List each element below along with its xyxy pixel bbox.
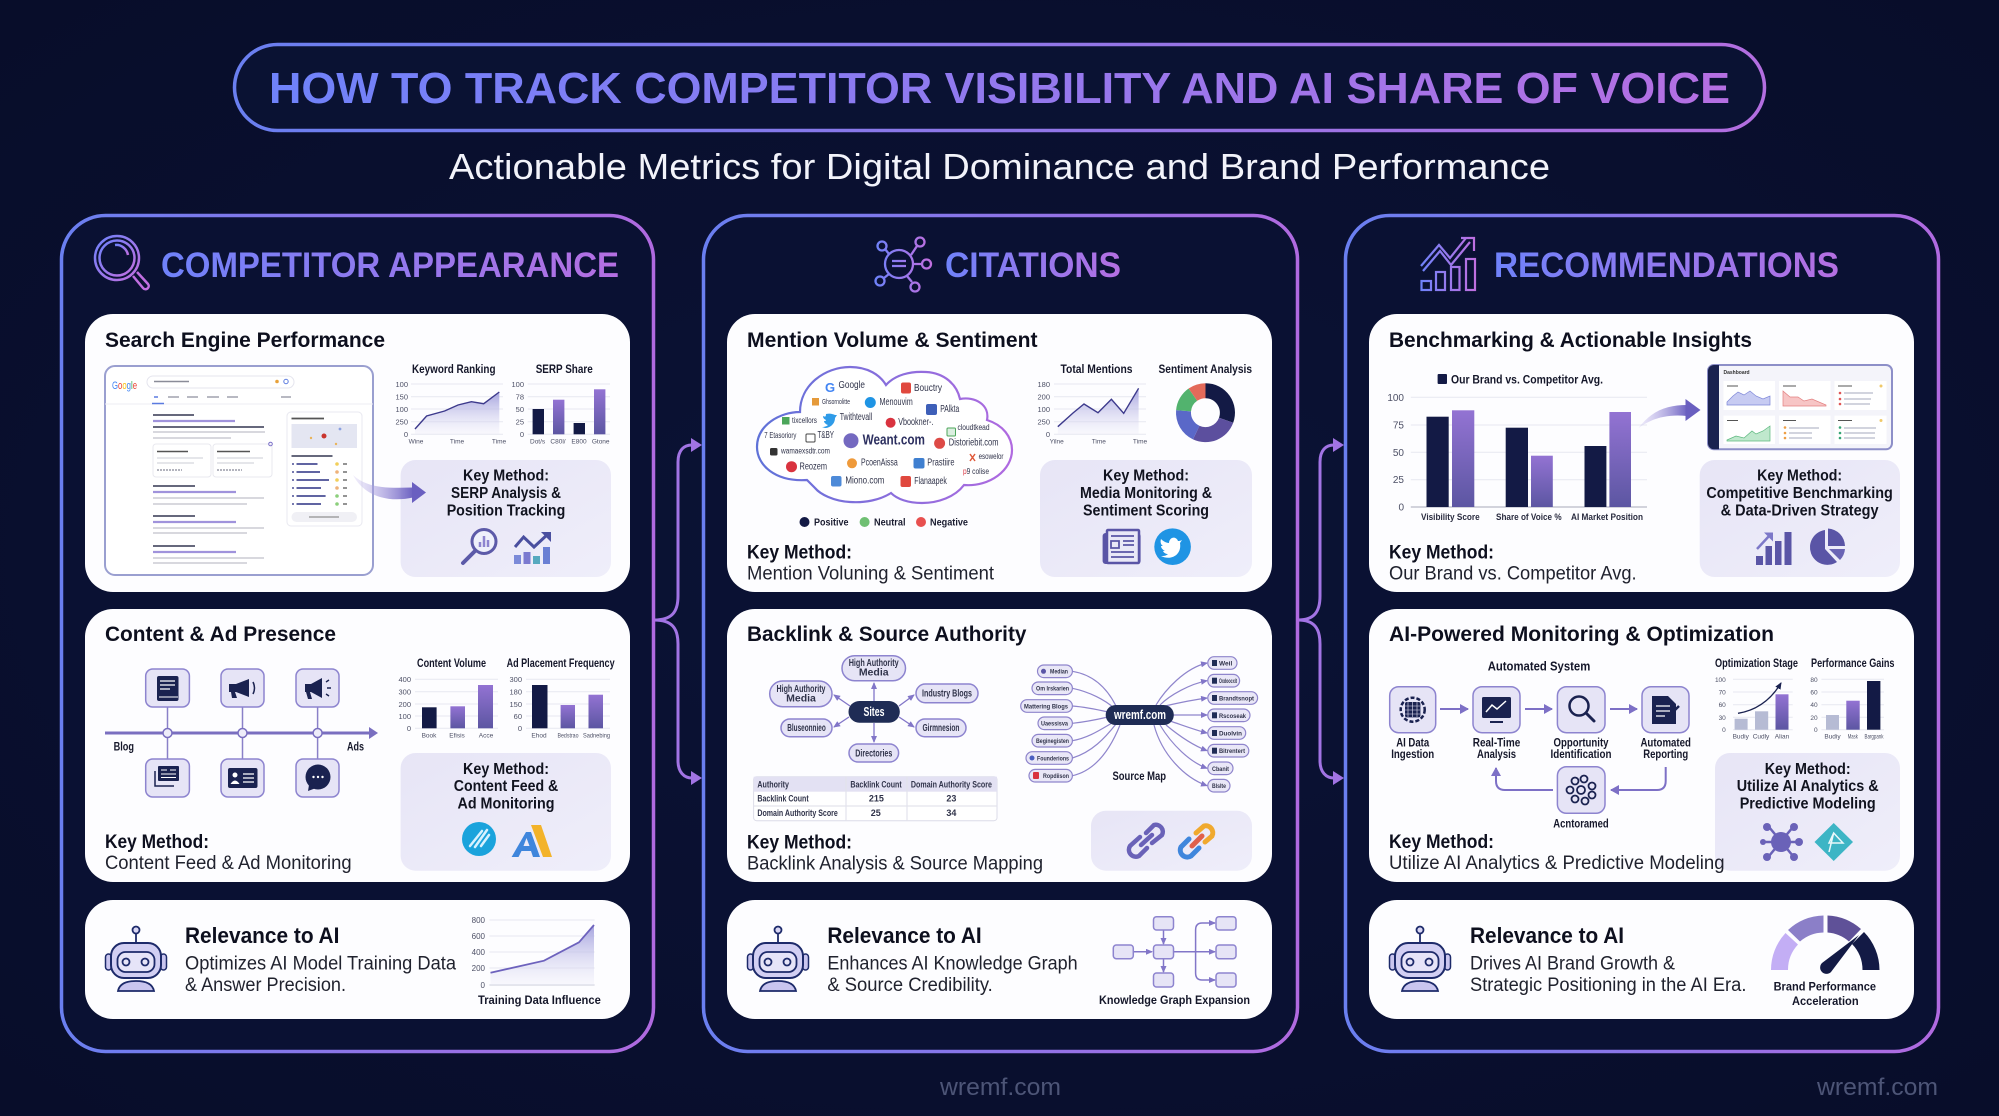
title banner: HOW TO TRACK COMPETITOR VISIBILITY AND AI SHARE OF VOICE (269, 64, 1730, 113)
key method box: SERP: SERP Analysis & (451, 485, 561, 502)
grouped bar chart: our brand vs competitor: 50 (1393, 448, 1404, 459)
icon: pie chart (1810, 528, 1845, 565)
gauge: brand performance acceleration (1771, 916, 1880, 1008)
icon: growth bars and arrow (1421, 238, 1475, 290)
brand mention cloud: T&BY (818, 430, 834, 441)
brand mention cloud: p9 colise (963, 467, 989, 476)
text: relevance to AI (827, 923, 1078, 996)
hub diagram: sites: Girmnesion (922, 722, 960, 734)
icon: robot (106, 926, 166, 991)
key method text: backlink: Key Method: (747, 832, 852, 853)
line chart: total mentions: Yilne (1050, 438, 1064, 446)
flow diagram: automated system: Ingestion (1391, 749, 1434, 761)
text: relevance to AI: Strategic Positioning in the AI Era. (1470, 975, 1746, 996)
icon: bars with arrow (1756, 532, 1792, 565)
gauge: brand performance acceleration: Acceleration (1792, 996, 1859, 1008)
key method box: content feed: Key Method: (463, 761, 549, 778)
brand mention cloud: Flanaapek (914, 476, 947, 487)
bar chart: optimization stage: Alian (1775, 734, 1790, 740)
brand mention cloud: wamaexsdtr.com (780, 447, 830, 456)
icon: magnifier with bars (463, 530, 496, 563)
hub diagram: sites (770, 656, 978, 762)
donut chart: sentiment analysis (1158, 364, 1252, 442)
bar chart: content volume: Acce (479, 732, 494, 740)
line chart: keyword ranking: Wine (409, 438, 424, 446)
hub diagram: sites: High Authority (776, 683, 826, 695)
area chart: training data influence (472, 916, 601, 1007)
legend: sentiment: Positive (814, 517, 849, 529)
bar chart: SERP share: 100 (511, 380, 524, 389)
heading: AI-powered monitoring: AI-Powered Monitoring & Optimization (1389, 622, 1774, 646)
key method box: content feed (401, 753, 611, 871)
diagram: knowledge graph expansion: Knowledge Graph Expansion (1099, 993, 1250, 1007)
bar chart: optimization stage: 100 (1715, 677, 1726, 684)
key method text: content feed: Content Feed & Ad Monitoring (105, 853, 352, 874)
bar chart: optimization stage: Cudly (1753, 734, 1770, 740)
gauge: brand performance acceleration: Brand Performance (1774, 982, 1876, 994)
grouped bar chart: our brand vs competitor: 75 (1393, 420, 1404, 432)
bar chart: SERP share: SERP Share (536, 364, 593, 376)
search results mockup (105, 366, 373, 575)
brand mention cloud: esowelor (979, 452, 1004, 461)
icon: report document (1642, 687, 1689, 733)
key method box: competitive benchmarking: Key Method: (1757, 468, 1842, 485)
legend: sentiment: Negative (930, 517, 968, 529)
text: relevance to AI: Relevance to AI (827, 923, 982, 948)
table: authority (754, 777, 997, 821)
key method text: benchmarking: Our Brand vs. Competitor Avg. (1389, 563, 1637, 584)
text: relevance to AI: & Source Credibility. (827, 975, 993, 996)
icon: magnifying glass (95, 236, 149, 289)
brand mention cloud: PAlkta (940, 404, 960, 415)
flow diagram: automated system: AI Data (1396, 738, 1430, 750)
card: search engine performance (85, 314, 630, 592)
line chart: keyword ranking: 100 (395, 380, 408, 389)
bar chart: content volume: Book (422, 732, 437, 740)
source map diagram: Uaessisva (1041, 721, 1068, 728)
brand mention cloud: Weant.com (863, 431, 925, 448)
bar chart: content volume: 100 (398, 712, 411, 721)
bar chart: ad placement frequency: Ad Placement Frequency (507, 658, 615, 670)
icon: growth chart (514, 532, 551, 564)
icon: loud speaker (296, 669, 339, 707)
heading: recommendations: RECOMMENDATIONS (1494, 246, 1839, 285)
key method text: mention (747, 542, 995, 584)
key method text: benchmarking (1389, 542, 1637, 584)
table: authority: 25 (871, 808, 881, 818)
key method box: competitive benchmarking: & Data-Driven Strategy (1721, 503, 1879, 520)
text: relevance to AI: Relevance to AI (185, 923, 339, 948)
key method box: competitive benchmarking (1700, 460, 1900, 577)
key method box: AI analytics (1715, 753, 1900, 871)
hub diagram: sites: High Authority (849, 657, 899, 669)
flow diagram: automated system (1390, 659, 1691, 831)
flow diagram: automated system: Acntoramed (1553, 819, 1609, 831)
brand mention cloud (757, 367, 1012, 503)
panel: citations (704, 216, 1298, 1052)
icon: blue feed logo (462, 822, 496, 856)
grouped bar chart: our brand vs competitor (1387, 372, 1647, 523)
brand mention cloud: Distoriebit.com (949, 438, 998, 449)
line chart: keyword ranking: Time (492, 438, 506, 446)
flow diagram: automated system: Identification (1550, 749, 1612, 761)
card: relevance to AI, knowledge graph (727, 900, 1272, 1019)
table: authority: Backlink Count (757, 794, 809, 804)
key method box: media monitoring (1040, 460, 1252, 577)
card: content and ad presence (85, 609, 630, 882)
bar chart: ad placement frequency: 0 (518, 724, 522, 733)
bar chart: optimization stage (1715, 658, 1798, 740)
line chart: keyword ranking: Keyword Ranking (412, 364, 496, 376)
line chart: total mentions: 200 (1037, 392, 1050, 402)
bar chart: performance gains: Budiy (1824, 734, 1841, 740)
key method box: competitive benchmarking: Competitive Benchmarking (1706, 485, 1893, 502)
source map diagram: Source Map (1112, 771, 1166, 783)
bar chart: ad placement frequency: 150 (509, 700, 522, 709)
brand mention cloud: cloudtkead (958, 423, 990, 432)
bar chart: SERP share: 0 (520, 430, 524, 439)
icon: monitor (1473, 687, 1520, 733)
heading: citations: CITATIONS (945, 246, 1121, 285)
heading: mention volume and sentiment: Mention Volume & Sentiment (747, 328, 1038, 352)
source map diagram: Weil (1219, 660, 1232, 668)
text: relevance to AI: Relevance to AI (1470, 923, 1624, 948)
brand mention cloud: tixcellors (792, 416, 817, 425)
bar chart: SERP share: 25 (516, 418, 524, 426)
brand mention cloud: Twithtevall (840, 412, 872, 423)
arrow: citations to recommendations (1298, 438, 1344, 785)
brand mention cloud: Prastiire (927, 458, 955, 469)
icon: citation network (876, 238, 931, 292)
bar chart: performance gains: Performance Gains (1811, 658, 1894, 670)
timeline diagram: Blog (114, 740, 134, 754)
source map diagram: Bitrentert (1219, 748, 1246, 755)
bar chart: SERP share: 78 (516, 392, 524, 402)
line chart: total mentions (1037, 364, 1147, 446)
key method box: content feed: Content Feed & (454, 778, 558, 795)
bar chart: SERP share: E800 (571, 438, 587, 446)
card: mention volume and sentiment (727, 314, 1272, 592)
card: relevance to AI, training data (85, 900, 630, 1019)
table: authority: Domain Authority Score (757, 808, 838, 818)
key method text: content feed (105, 832, 352, 874)
source map diagram: Beginegisten (1036, 738, 1069, 745)
source map diagram: Blslte (1212, 783, 1226, 790)
text: relevance to AI: Optimizes AI Model Training Data (185, 953, 456, 974)
bar chart: performance gains: 40 (1810, 702, 1818, 709)
table: authority: Domain Authority Score (911, 779, 992, 789)
arrow: chart to dashboard (1638, 399, 1700, 428)
area chart: training data influence: 600 (472, 932, 486, 941)
bar chart: optimization stage: 30 (1719, 715, 1726, 722)
panel: competitor appearance (62, 216, 654, 1052)
line chart: keyword ranking: Time (450, 438, 464, 446)
bar chart: optimization stage: 70 (1719, 690, 1726, 696)
icon: robot (1390, 926, 1450, 991)
icon: chat bubble (296, 759, 339, 797)
key method text: mention: Key Method: (747, 542, 852, 563)
icon: book (146, 669, 189, 707)
key method box: links (1091, 811, 1252, 871)
source map diagram (1021, 657, 1258, 792)
key method text: content feed: Key Method: (105, 832, 209, 853)
hub diagram: sites: Bluseonnieo (787, 722, 826, 734)
icon: chain link (1129, 825, 1163, 857)
dashboard mockup (1708, 365, 1892, 449)
icon: teal diamond (1814, 823, 1853, 861)
card: backlink and source authority (727, 609, 1272, 882)
flow diagram: automated system: Reporting (1643, 749, 1688, 761)
bar chart: performance gains (1810, 658, 1894, 740)
bar chart: content volume: Content Volume (417, 658, 486, 670)
bar chart: ad placement frequency: 60 (514, 712, 522, 721)
bar chart: ad placement frequency: 300 (509, 675, 522, 684)
flow diagram: automated system: Analysis (1477, 749, 1516, 761)
bar chart: optimization stage: Budiy (1733, 734, 1750, 740)
bar chart: ad placement frequency: Bedstrao (558, 732, 579, 740)
key method text: AI analytics: Utilize AI Analytics & Predictive Modeling (1389, 853, 1725, 874)
source map diagram: wremf.com (1113, 707, 1166, 722)
line chart: total mentions: 250 (1037, 418, 1050, 426)
hub diagram: sites: Media (859, 666, 889, 678)
grouped bar chart: our brand vs competitor: 25 (1393, 475, 1404, 486)
title banner (234, 44, 1764, 130)
area chart: training data influence: 800 (472, 916, 486, 925)
brand mention cloud: Ghsornolitte (822, 397, 850, 406)
icon: newspaper (1103, 530, 1141, 564)
key method text: backlink (747, 832, 1043, 874)
key method box: AI analytics: Predictive Modeling (1740, 796, 1876, 813)
icon: robot (748, 926, 808, 991)
bar chart: performance gains: Mask (1848, 734, 1858, 740)
heading: benchmarking: Benchmarking & Actionable Insights (1389, 328, 1752, 352)
key method text: AI analytics (1389, 832, 1725, 874)
search results mockup: Google (112, 380, 137, 392)
subtitle: Actionable Metrics for Digital Dominance and Brand Performance (449, 146, 1550, 187)
line chart: total mentions: Total Mentions (1060, 364, 1132, 376)
line chart: total mentions: Time (1133, 438, 1147, 446)
heading: search engine performance: Search Engine Performance (105, 328, 385, 352)
line chart: total mentions: 100 (1037, 405, 1050, 414)
bar chart: ad placement frequency: Ehod (531, 732, 547, 740)
grouped bar chart: our brand vs competitor: AI Market Position (1571, 512, 1643, 523)
bar chart: performance gains: 20 (1810, 715, 1818, 722)
arrow: competitor appearance to citations (654, 438, 702, 785)
line chart: keyword ranking: 150 (395, 392, 408, 402)
brand mention cloud: Bouctry (914, 383, 942, 394)
bar chart: SERP share (511, 364, 610, 446)
source map diagram: Om lrskarien (1036, 686, 1069, 693)
bar chart: optimization stage: 60 (1719, 702, 1726, 709)
key method text: backlink: Backlink Analysis & Source Mapping (747, 853, 1043, 874)
bar chart: content volume: 0 (407, 724, 411, 733)
grouped bar chart: our brand vs competitor: Our Brand vs. Competitor Avg. (1451, 372, 1603, 386)
card: benchmarking and actionable insights (1369, 314, 1914, 592)
key method box: content feed: Ad Monitoring (458, 796, 554, 813)
arrow: results to key method (353, 475, 426, 503)
legend: sentiment: Neutral (874, 517, 906, 529)
source map diagram: Brandtsnopt (1219, 696, 1255, 702)
brand mention cloud: Menouvim (880, 397, 913, 408)
bar chart: performance gains: Bargpank (1864, 734, 1884, 740)
icon: twitter bird (1154, 528, 1191, 565)
source map diagram: Rscoseak (1219, 713, 1246, 720)
bar chart: SERP share: Dot/s (530, 438, 546, 446)
bar chart: ad placement frequency: Sadnebing (583, 732, 610, 740)
area chart: training data influence: 200 (472, 964, 486, 973)
text: relevance to AI: Enhances AI Knowledge Graph (827, 953, 1078, 974)
bar chart: content volume (398, 658, 498, 740)
card: AI-powered monitoring and optimization (1369, 609, 1914, 882)
key method box: media monitoring: Key Method: (1103, 468, 1189, 485)
flow diagram: automated system: Automated System (1488, 659, 1590, 674)
line chart: total mentions: 180 (1037, 380, 1050, 389)
key method box: SERP: Key Method: (463, 468, 549, 485)
bar chart: optimization stage: Optimization Stage (1715, 658, 1798, 670)
grouped bar chart: our brand vs competitor: Share of Voice % (1496, 512, 1562, 523)
bar chart: ad placement frequency: 180 (509, 688, 522, 696)
table: authority: Backlink Count (850, 779, 902, 789)
diagram: knowledge graph expansion (1099, 917, 1250, 1007)
hub diagram: sites: Directories (855, 748, 892, 760)
panel: recommendations (1346, 216, 1938, 1052)
icon: AI network hub (1760, 823, 1803, 861)
text: relevance to AI: Drives AI Brand Growth & (1470, 953, 1675, 974)
bar chart: content volume: 300 (398, 688, 411, 696)
brand mention cloud: 7 Etasoriory (764, 431, 796, 440)
brand mention cloud: Google (838, 380, 865, 391)
text: relevance to AI (185, 923, 456, 996)
bar chart: SERP share: 50 (516, 405, 524, 414)
icon: AI chip (1390, 687, 1436, 733)
text: relevance to AI: & Answer Precision. (185, 975, 346, 996)
flow diagram: automated system: Opportunity (1554, 738, 1609, 750)
source map diagram: Duolvin (1219, 730, 1242, 738)
key method text: AI analytics: Key Method: (1389, 832, 1494, 853)
source map diagram: Mattering Blogs (1024, 703, 1068, 710)
footer watermark: right: wremf.com (1816, 1074, 1938, 1101)
source map diagram: Ropdiison (1043, 773, 1069, 780)
brand mention cloud: Vbookner-. (898, 417, 933, 428)
grouped bar chart: our brand vs competitor: 0 (1398, 502, 1404, 514)
key method box: AI analytics: Key Method: (1765, 761, 1851, 778)
flow diagram: automated system: Real-Time (1473, 738, 1520, 750)
source map diagram: Median (1050, 669, 1068, 676)
line chart: keyword ranking: 250 (395, 418, 408, 426)
line chart: keyword ranking (395, 364, 506, 446)
key method box: media monitoring: Sentiment Scoring (1083, 503, 1209, 520)
key method box: SERP: Position Tracking (447, 503, 565, 520)
source map diagram: Founderions (1037, 755, 1069, 762)
timeline diagram (105, 669, 378, 797)
heading: content and ad presence: Content & Ad Presence (105, 622, 336, 646)
dashboard mockup: Dashboard (1724, 370, 1750, 376)
key method box: media monitoring: Media Monitoring & (1080, 485, 1212, 502)
key method text: mention: Mention Voluning & Sentiment (747, 563, 995, 584)
bar chart: performance gains: 60 (1810, 690, 1818, 696)
line chart: total mentions: Time (1092, 438, 1106, 446)
table: authority: 23 (946, 794, 956, 804)
key method box: AI analytics: Utilize AI Analytics & (1737, 778, 1879, 795)
bar chart: optimization stage: 0 (1722, 727, 1726, 734)
icon: ads logo (512, 825, 552, 857)
icon: colored chain link (1180, 826, 1213, 857)
brand mention cloud: Reozem (800, 461, 827, 472)
timeline diagram: Ads (347, 740, 364, 754)
hub diagram: sites: Media (786, 692, 816, 704)
heading: backlink and source authority: Backlink & Source Authority (747, 622, 1026, 646)
donut chart: sentiment analysis: Sentiment Analysis (1158, 364, 1252, 376)
brand mention cloud: G (825, 380, 835, 395)
bar chart: SERP share: Gtone (592, 438, 610, 446)
grouped bar chart: our brand vs competitor: 100 (1387, 393, 1404, 404)
line chart: keyword ranking: 0 (404, 430, 408, 439)
icon: megaphone (221, 669, 264, 707)
bar chart: performance gains: 0 (1814, 727, 1818, 734)
card: relevance to AI, brand growth (1369, 900, 1914, 1019)
icon: search (1557, 687, 1605, 733)
bar chart: content volume: 200 (398, 700, 411, 709)
source map diagram: Cbanit (1212, 766, 1230, 773)
key method text: benchmarking: Key Method: (1389, 542, 1494, 563)
bar chart: content volume: 400 (398, 675, 411, 684)
line chart: keyword ranking: 100 (395, 405, 408, 414)
table: authority: 34 (946, 808, 956, 818)
icon: stacked documents (146, 759, 189, 797)
brand mention cloud: Miono.com (845, 475, 884, 486)
legend: sentiment (800, 517, 968, 529)
table: authority: Authority (757, 779, 789, 789)
bar chart: ad placement frequency (507, 658, 615, 740)
hub diagram: sites: Industry Blogs (922, 688, 972, 700)
icon: neural network (1557, 767, 1605, 813)
area chart: training data influence: Training Data Influence (478, 993, 601, 1007)
source map diagram: Oxdoocxit (1219, 678, 1237, 685)
key method box: SERP (401, 460, 611, 577)
brand mention cloud: PcoenAissa (861, 458, 898, 469)
area chart: training data influence: 0 (481, 981, 486, 990)
area chart: training data influence: 400 (472, 948, 486, 957)
text: relevance to AI (1470, 923, 1746, 996)
bar chart: content volume: Efisis (449, 732, 466, 740)
table: authority: 215 (869, 794, 884, 804)
bar chart: performance gains: 80 (1810, 677, 1818, 684)
bar chart: SERP share: C80l/ (550, 438, 566, 446)
line chart: total mentions: 0 (1046, 430, 1050, 439)
flow diagram: automated system: Automated (1640, 738, 1691, 750)
heading: competitor appearance: COMPETITOR APPEARANCE (161, 246, 619, 285)
icon: ID card (221, 759, 264, 797)
footer watermark: center: wremf.com (939, 1074, 1061, 1101)
hub diagram: sites: Sites (864, 705, 885, 719)
grouped bar chart: our brand vs competitor: Visibility Score (1421, 512, 1480, 523)
